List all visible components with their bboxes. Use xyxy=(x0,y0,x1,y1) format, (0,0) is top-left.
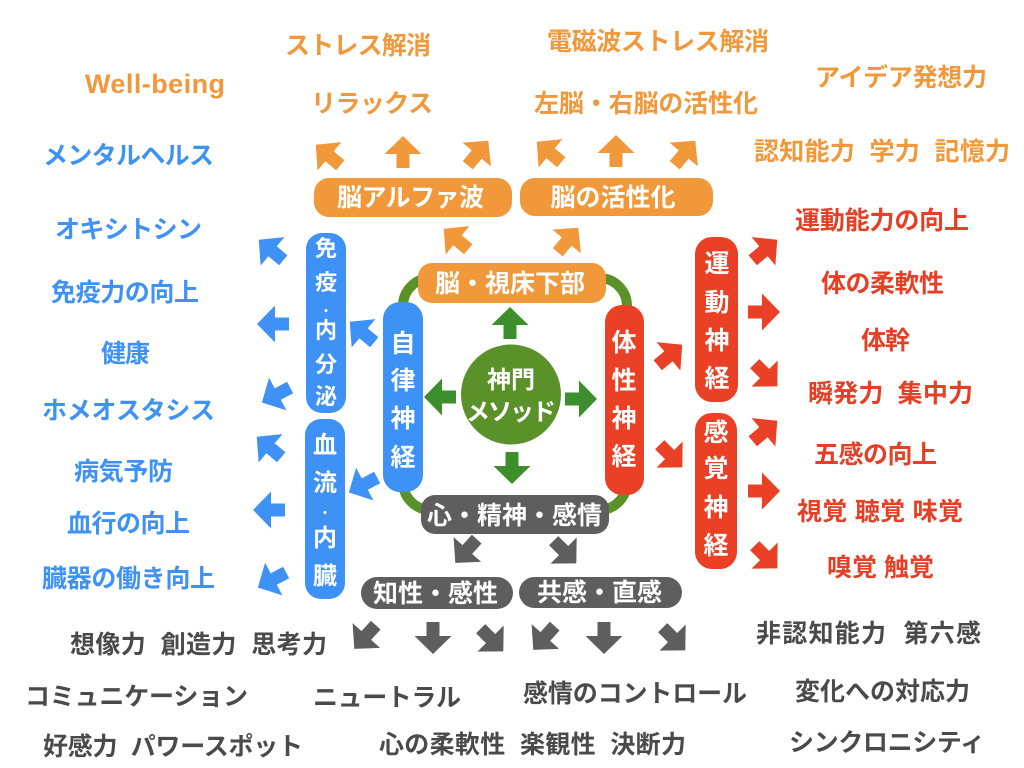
arrow: up-right xyxy=(741,226,789,274)
panel: autonomic nerves: 経 xyxy=(390,444,416,472)
arrow: autonomic to immune xyxy=(338,308,386,356)
label: non-cognitive ability, sixth sense: 非認知能力 第六感 xyxy=(756,620,981,648)
panel: empathy and intuition xyxy=(519,577,682,608)
arrow: down xyxy=(586,622,622,654)
arrow: centre down xyxy=(494,452,530,484)
panel: immune and endocrine: 免 xyxy=(315,236,337,261)
panel: blood flow and organs xyxy=(305,419,345,599)
arrow: up-left xyxy=(304,131,352,179)
panel: centre circle, Shinmon method xyxy=(461,344,561,444)
panel: autonomic nerves: 律 xyxy=(390,367,416,395)
label: electromagnetic stress relief: 電磁波ストレス解消 xyxy=(547,28,769,56)
label: flexibility: 体の柔軟性 xyxy=(821,270,944,298)
label: blood circulation: 血行の向上 xyxy=(67,510,190,538)
arrow: centre left xyxy=(424,378,456,416)
label: explosive power, concentration: 瞬発力 集中力 xyxy=(808,380,973,408)
label: adaptability: 変化への対応力 xyxy=(795,678,970,706)
arrow: autonomic to blood flow xyxy=(340,461,386,509)
label: health: 健康 xyxy=(101,340,150,368)
panel: mind, spirit, emotion: 心・精神・感情 xyxy=(427,502,602,530)
arrow: hypothalamus to brain activation xyxy=(544,216,592,264)
arrow: right xyxy=(748,294,780,330)
arrow: left xyxy=(253,492,285,528)
label: flexible mind, optimism, decisiveness: 心の柔軟性 楽観性 決断力 xyxy=(379,731,686,759)
label: likability, power spot: 好感力 パワースポット xyxy=(43,733,303,761)
arrow: down-left xyxy=(341,613,389,661)
red outcome labels xyxy=(795,207,973,582)
panel: brain activation: 脳の活性化 xyxy=(550,184,676,212)
label: cognition, scholastic ability, memory: 認知能力 学力 記憶力 xyxy=(754,138,1010,166)
panel: brain activation xyxy=(520,178,713,216)
panel: blood flow and organs: 内 xyxy=(313,525,337,552)
panel: immune and endocrine: 泌 xyxy=(315,384,337,409)
panel: alpha waves: 脳アルファ波 xyxy=(337,184,484,212)
panel: immune and endocrine: 内 xyxy=(315,318,337,343)
label: emotion control: 感情のコントロール xyxy=(523,680,747,708)
panel: brain and hypothalamus: 脳・視床下部 xyxy=(435,270,585,298)
arrow: up-right xyxy=(661,129,709,177)
arrow: up-left xyxy=(247,226,295,274)
blue arrows xyxy=(245,226,386,604)
panel: brain and hypothalamus xyxy=(418,263,606,303)
label: immunity improvement: 免疫力の向上 xyxy=(51,279,199,307)
arrow: mind to empathy xyxy=(541,528,589,576)
panel: alpha waves xyxy=(314,178,512,217)
arrow: mind to intellect xyxy=(442,527,490,575)
panel: somatic nerves: 体 xyxy=(611,329,637,357)
panel: immune and endocrine: 分 xyxy=(315,352,337,377)
panel: autonomic nerves: 神 xyxy=(390,405,416,433)
panel: motor nerves: 運 xyxy=(704,250,730,278)
panel: centre circle, Shinmon method: メソッド xyxy=(466,399,556,426)
panel: sensory nerves xyxy=(695,413,737,569)
panel: motor nerves: 動 xyxy=(704,289,730,317)
panel: blood flow and organs: 流 xyxy=(313,470,337,497)
arrow: centre right xyxy=(565,380,597,418)
green arrows xyxy=(424,307,597,484)
arrow: down-right xyxy=(468,616,516,664)
panel: somatic nerves: 経 xyxy=(611,443,637,471)
label: idea generation: アイデア発想力 xyxy=(815,63,987,92)
label: mental health: メンタルヘルス xyxy=(43,142,214,170)
panel: empathy and intuition: 共感・直感 xyxy=(537,579,662,607)
panel: autonomic nerves: 自 xyxy=(390,330,416,358)
gray arrows xyxy=(341,527,698,664)
label: synchronicity: シンクロニシティ xyxy=(789,729,985,757)
blue outcome labels xyxy=(42,142,215,593)
label: well-being: Well-being xyxy=(85,69,225,99)
panel: somatic nerves xyxy=(605,305,644,495)
arrow: up-left xyxy=(245,423,293,471)
label: disease prevention: 病気予防 xyxy=(74,458,173,486)
arrow: down-left xyxy=(520,614,568,662)
panel: motor nerves xyxy=(695,237,738,402)
label: imagination, creativity, thinking: 想像力 創造力 思考力 xyxy=(70,631,327,659)
orange outcome labels xyxy=(85,28,1010,166)
panel: centre circle, Shinmon method: 神門 xyxy=(487,367,535,394)
label: organ function: 臓器の働き向上 xyxy=(42,565,215,593)
dark outcome labels xyxy=(25,620,985,761)
label: sight, hearing, taste: 視覚 聴覚 味覚 xyxy=(797,498,963,526)
label: relax: リラックス xyxy=(311,90,433,118)
panel: blood flow and organs: ・ xyxy=(319,506,331,520)
orange arrows xyxy=(304,128,709,264)
label: homeostasis: ホメオスタシス xyxy=(42,397,215,425)
arrow: down-left xyxy=(253,371,299,419)
arrow: up-right xyxy=(741,407,789,455)
arrow: somatic to sensory xyxy=(647,432,695,480)
panel: mind, spirit, emotion xyxy=(421,495,609,534)
arrow: up-left xyxy=(525,128,573,176)
panel: somatic nerves: 神 xyxy=(611,405,637,433)
panel: blood flow and organs: 臓 xyxy=(313,563,337,590)
arrow: hypothalamus to alpha waves xyxy=(432,215,480,263)
arrow: down-right xyxy=(742,533,790,581)
arrow: up xyxy=(598,135,634,167)
label: core: 体幹 xyxy=(861,327,910,355)
label: smell, touch: 嗅覚 触覚 xyxy=(827,554,934,582)
panel: blood flow and organs: 血 xyxy=(313,432,337,459)
arrow: left xyxy=(257,306,289,342)
arrow: up-right xyxy=(454,129,502,177)
panel: motor nerves: 神 xyxy=(704,327,730,355)
arrow: up xyxy=(384,136,422,168)
label: stress relief: ストレス解消 xyxy=(285,32,431,60)
panel: intellect and sensitivity: 知性・感性 xyxy=(373,580,498,608)
green ring connector xyxy=(403,278,627,510)
label: neutral: ニュートラル xyxy=(313,684,461,712)
arrow: down-right xyxy=(742,351,790,399)
panel: sensory nerves: 神 xyxy=(703,494,729,522)
panel: sensory nerves: 経 xyxy=(703,532,729,560)
panel: immune and endocrine: ・ xyxy=(320,304,332,318)
panel: sensory nerves: 感 xyxy=(703,419,729,447)
arrow: down-right xyxy=(650,615,698,663)
panel: motor nerves: 経 xyxy=(704,365,730,393)
arrow: centre up xyxy=(492,307,528,339)
arrow: down-left xyxy=(249,556,295,604)
label: motor ability: 運動能力の向上 xyxy=(795,207,969,235)
panel: immune and endocrine: 疫 xyxy=(315,270,337,295)
panel: autonomic nerves xyxy=(383,302,423,492)
arrow: down xyxy=(414,622,452,654)
panel: sensory nerves: 覚 xyxy=(703,455,729,483)
arrow: right xyxy=(748,472,780,510)
label: five senses: 五感の向上 xyxy=(814,441,937,469)
label: left and right brain activation: 左脳・右脳の活性化 xyxy=(534,90,758,118)
panel: immune and endocrine xyxy=(306,233,346,413)
label: oxytocin: オキシトシン xyxy=(55,216,202,244)
label: communication: コミュニケーション xyxy=(25,683,248,711)
arrow: somatic to motor xyxy=(646,331,694,379)
red arrows xyxy=(646,226,790,581)
panel: somatic nerves: 性 xyxy=(611,367,637,395)
